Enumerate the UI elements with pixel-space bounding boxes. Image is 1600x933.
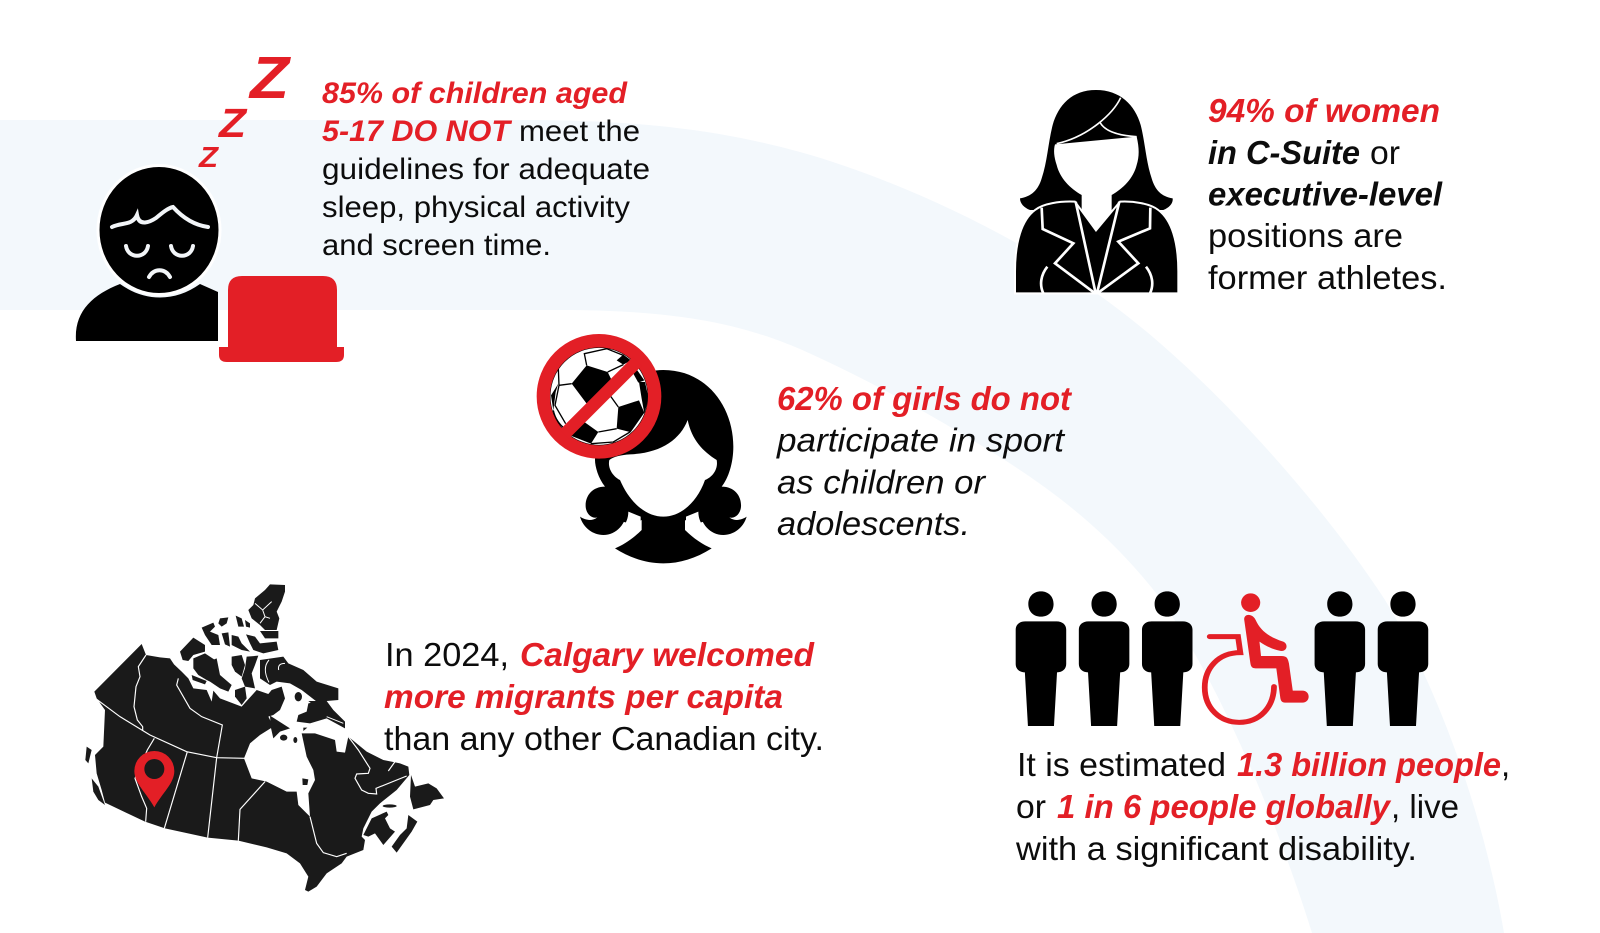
soccer ball and ban sign [543, 341, 655, 452]
hair [1020, 90, 1173, 210]
girls text: as children or [777, 464, 987, 500]
Calgary text [384, 636, 824, 757]
women text: positions are [1208, 217, 1403, 254]
Calgary text: In 2024, [385, 636, 509, 673]
person 3 [1142, 591, 1192, 726]
person 5 [1378, 591, 1428, 726]
sleep text: meet the [519, 115, 640, 148]
panel: Calgary migration statistic [85, 584, 824, 892]
icon: businesswoman [1015, 90, 1178, 293]
panel: girls in sport statistic [543, 341, 1073, 563]
panel: disability statistic [1015, 591, 1510, 867]
disability text [1015, 746, 1510, 867]
disability text: , live [1391, 788, 1459, 825]
jacket lapels [1041, 202, 1152, 293]
Calgary text: Calgary welcomed [520, 636, 815, 673]
hair parting [1057, 98, 1137, 144]
sleep letters Z: Z [248, 45, 291, 111]
girls text: adolescents. [777, 505, 970, 542]
child face [112, 207, 208, 277]
Atlantic and Pacific islands [85, 747, 444, 853]
face and neck [1054, 137, 1139, 230]
wheelchair user [1205, 593, 1309, 722]
women text: executive-level [1208, 176, 1443, 212]
ban ring and slash [543, 341, 655, 452]
sleep text: 5-17 DO NOT [322, 115, 513, 148]
disability text: , [1501, 746, 1510, 783]
icon: row of people with wheelchair user [1016, 591, 1428, 726]
sleep text: guidelines for adequate [322, 153, 650, 186]
women text: 94% of women [1208, 92, 1440, 129]
girls text: 62% of girls do not [777, 380, 1073, 417]
icon: sleeping child at laptop [76, 45, 344, 362]
person 2 [1079, 591, 1129, 726]
map of Canada [85, 584, 444, 892]
mainland [94, 644, 409, 892]
sleep letters Z: Z [198, 142, 219, 174]
disability text: 1 in 6 people globally [1057, 788, 1392, 825]
girl face [609, 420, 717, 517]
sleep text: sleep, physical activity [322, 191, 630, 224]
person 4 [1315, 591, 1365, 726]
gaps beside neck [605, 512, 722, 543]
sleep letters Z: Z [218, 100, 248, 146]
Arctic channels [255, 602, 343, 723]
child head [98, 166, 220, 294]
Arctic archipelago [180, 584, 345, 743]
province borders [97, 655, 407, 857]
sleep text: and screen time. [322, 229, 551, 262]
disability text: with a significant disability. [1015, 830, 1417, 867]
ball [550, 347, 648, 446]
sleep letters Z [198, 45, 291, 174]
sleep text: 85% of children aged [322, 77, 628, 110]
laptop [219, 276, 344, 362]
disability text: It is estimated [1017, 746, 1226, 783]
disability text: or [1016, 788, 1046, 825]
James Bay island [302, 778, 308, 785]
icon: girl with banned soccer ball [543, 341, 747, 563]
women text: in C-Suite [1208, 134, 1360, 171]
person 1 [1016, 591, 1066, 726]
women text [1208, 92, 1447, 296]
location pin [134, 751, 174, 807]
women text: former athletes. [1208, 259, 1447, 296]
child body [76, 284, 218, 341]
disability text: 1.3 billion people [1237, 746, 1501, 783]
panel: sleep statistic [76, 45, 650, 362]
women text: or [1370, 134, 1400, 171]
girls text: participate in sport [776, 422, 1066, 458]
Calgary text: than any other Canadian city. [384, 720, 824, 757]
sleep text [322, 77, 650, 262]
panel: women executives statistic [1015, 90, 1447, 296]
girls text [776, 380, 1073, 542]
girl hair and neck [580, 370, 747, 563]
jacket [1015, 202, 1178, 293]
Calgary text: more migrants per capita [384, 678, 783, 715]
